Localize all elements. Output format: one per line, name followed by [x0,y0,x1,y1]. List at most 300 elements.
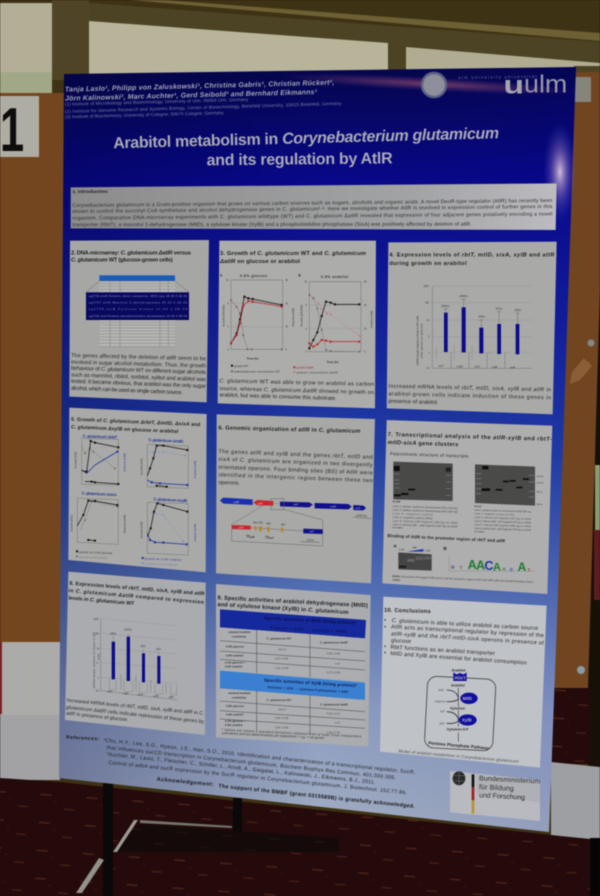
genomic text: orientated operons. Four binding sites (BS) of AtlR were [218,465,373,477]
chart B: 0.8% arabitol: Arabitol [mM] [370,311,374,328]
model of arabitol metabolism: Xylulose [450,706,465,710]
binding subheading: Binding of AtlR to the promoter region of rbtT and atlR [387,533,506,543]
sequence logo B: C [510,567,513,572]
ministry name: für Bildung [479,784,514,793]
microarray heading: 2. DNA-microarray: C. glutamicum ΔatlR versus [71,250,191,256]
references: Control of adhA and sucR expression by the SucR regulator in Corynebacterium glutamicum. J. Biotechnol. 152:77-86. [108,760,407,796]
expression text [388,384,551,406]
chart B: 0.8% arabitol: B [298,274,301,278]
table: MtlD activity: minimal medium [228,630,251,634]
references: ²Auchter, M., Laslo, T., Fleischer, C., Schiller, L., Arndt, A., Gaigalat, L., Kalinowski, J., Eikmanns, B.J., 2011. [106,752,376,786]
repression text: atlR in presence of glucose. [66,711,129,723]
growth heading: ΔatlR on glucose or arabitol [219,259,300,265]
gel 2 legend: M:rbtT [474,505,482,508]
chart: mtlD mutant: Arabitol [mM] [193,461,197,478]
repression bar chart: (125)x [124,627,133,631]
chart: xylB mutant: Arabitol [mM] [193,524,197,542]
repression heading: 8. Expression levels of rbtT, mtlD, sixA, xylB and atlR [69,581,205,597]
ministry name [479,775,541,802]
EMSA gel A: 1 μM [425,551,430,553]
repression bar chart: xylB [153,694,159,698]
references: that influences sucCD transcription in Corynebacterium glutamicum. Biochem Biophys Res Commun. 401:300-305. [106,745,396,781]
introduction text: Corynebacterium glutamicum is a Gram-positive organism that grows on various carbon sources such as sugars, alcohols and organic acids. A novel DeoR-type regulator (AtlR) has recently been [72,198,552,209]
chart: sixA mutant: Glucose [mM] [123,515,127,533]
transcription heading: mtlD-sixA gene clusters [388,440,458,448]
EMSA gel A: 0 nM [399,550,404,552]
gel 2 legend: M: marker [474,530,485,534]
growth legend [231,364,339,374]
poster sheet [59,67,580,832]
poster header: authors, title, logos [65,72,567,169]
repression bar chart: (9)x [156,647,161,651]
repression bar chart [92,618,177,700]
repression bar chart: rbtT [107,690,113,694]
flag stripe [472,774,474,814]
table: MtlD activity: 0.6% arabitol [225,665,243,669]
expression bar chart: 0.1 [427,368,431,370]
sequence logo B: A [518,560,527,574]
microarray table [86,275,189,347]
table: XylB activity: 0.8% arabitol [226,712,244,716]
gel 2: 500 bp [536,491,543,493]
gel 2 legend: Lane 6: internal sixA - mtlD fragment (750 bp) on cDNA [474,527,531,532]
gel 1 legend: M:atlR [393,500,401,504]
table: MtlD activity: 3.86 ± 0.88 [327,652,340,656]
growth legend: arabitol consumption ΔatlR [296,370,339,374]
panel: 6. Genomic organization [216,414,375,583]
repression bar chart: atlR [169,695,174,699]
repression heading: in C. glutamicum ΔatlR compared to expression [68,588,204,606]
expression bar chart: rbtT [438,364,444,368]
table: MtlD activity: 0.5-0.7 [278,648,287,652]
chart B: 0.8% arabitol: 0 [306,352,308,354]
genomic text: identified in the intergenic region between these two [218,472,373,484]
microarray table: cg2739 sixA Putative phosphohistidine phosphatase 10.38 3.3E-03 [89,314,188,318]
activities footnote: * Values are means ± standard deviations obtained from at least three independent [222,728,362,739]
model of arabitol metabolism: ADP [439,722,445,725]
expression bar chart: (59)x [514,308,522,312]
mutants legend [76,550,182,567]
title: Arabitol metabolism in Corynebacterium glutamicum [113,125,499,152]
microarray table: cg2733 pfoR Putative ribitol transporter, MFS-type 38.90 6.3E-03 [89,294,188,298]
chart: sixA mutant: C. glutamicum ΔsixA [82,490,117,497]
expression bar chart: sixA [474,365,480,369]
microarray table: cg2738 xylB Xylulose kinase 11.90 2.0E-03 [89,307,188,311]
expression heading: during growth on arabitol [389,261,467,267]
ministry name: Bundesministerium [479,775,541,786]
growth text: arabitol, but was able to consume this substrate. [219,392,337,402]
gel 2 legend: Lane 5: internal mtlD fragment (950 bp) on cDNA [474,523,531,528]
growth heading [219,251,366,265]
sequence logo B: A [468,558,477,572]
panel: 9. Specific activities [216,584,371,747]
gel 2: 200 bp [536,504,543,506]
authors: Jörn Kalinowski², Marc Auchter¹, Gerd Seibold³ and Bernhard Eikmanns¹ [65,89,318,103]
sequence logo B: G [451,564,455,569]
gel 2 [475,464,544,506]
intergenic region inset: BS4 [281,524,286,526]
gene cluster map: atlR [257,501,263,505]
gene cluster map: 1000 bp [356,514,367,518]
table: MtlD activity: 0.2% glucose + [225,661,246,665]
gel 1 legend: Lane 6: internal atlR - xylB fragment (397 bp) on cDNA [393,523,458,528]
table: XylB activity: minimal medium [228,691,251,695]
genomic heading: 6. Genomic organization of atlR in C. glutamicum [218,425,360,435]
gene cluster map: rbtT [293,503,299,507]
intergenic region inset: BS3 [266,523,271,525]
expression bar chart: (61)x [496,306,503,310]
gel 1 [393,462,453,501]
mutants legend: glucose consumption [79,555,108,560]
repression bar chart: (8)x [141,644,146,648]
expression bar chart: 100 [425,303,430,305]
gel 1 legend: Lane 1: positive control on chromosomal DNA (750 bp) [393,505,458,510]
activities heading [217,595,368,616]
genomic text [218,449,373,487]
chart A: 0.8% glucose: 40 [285,303,289,305]
gel 1 legend [393,500,458,530]
table: XylB activity: Specific activities of XylB (U/mg protein)* [264,677,357,688]
affiliations: (2) Institute for Genome Research and Systems Biology, Center of Biotechnology, Bielefeld University, 33615 Bielefeld, Germany [65,101,342,114]
expression bar chart: cells grown on glucose [420,323,424,358]
growth legend: growth WT [234,364,249,368]
expression bar chart: (54)x [478,315,486,319]
chart: mtlD mutant [140,437,197,488]
references: ¹Cho, H.Y., Lee, S.G., Hyeon, J.E., Han, S.O., 2010. Identification and characterization of a transcriptional regulator, SucR, [103,738,415,776]
chart A: 0.8% glucose: 0 [285,349,287,351]
table: XylB activity: 0.2% glucose + [225,719,246,723]
sequence logo B: C [484,559,493,573]
table: MtlD activity: C. glutamicum WT [267,636,292,640]
panel: 7. Transcriptional analysis [382,420,552,594]
introduction text: shown to control the succinyl CoA synthetase and alcohol dehydrogenase genes in C. glutamicum¹·². Here we investigate whether AtlR is involved in expression control of further genes in this [72,204,553,215]
sequence logo B: A [493,561,501,573]
EMSA gel A: AtlR [412,546,417,549]
gel 1 legend: Lane 5: internal atlR fragment (250 bp) on cDNA [393,520,458,525]
chart B: 0.8% arabitol: Time [h] [327,360,338,364]
panel: 2. DNA-microarray [69,240,209,402]
table: XylB activity: 0.54 ± 0.08 [275,725,289,729]
repression bar chart: 0.1 [96,691,100,693]
mutants heading: C. glutamicum ΔxylB on glucose or arabitol [71,424,179,435]
table: XylB activity: containing [232,696,246,700]
gel 2 legend: Lane 1: positive control on chromosomal DNA (397 bp) [474,509,531,514]
chart: mtlD mutant: C. glutamicum ΔmtlD [148,437,184,444]
conclusions heading: 10. Conclusions [384,608,431,615]
intergenic region inset: rbtT [269,537,274,540]
table: MtlD activity: containing [232,635,246,639]
room number sign [0,96,39,165]
affiliations [65,97,342,119]
activities heading: and of xylulose kinase (XylB) in C. glutamicum [217,602,349,616]
conclusions list: glucose [391,638,411,645]
growth heading: 3. Growth of C. glutamicum WT and C. glutamicum [220,251,366,257]
gene cluster map: mtlD [330,505,337,509]
chart A: 0.8% glucose [220,273,295,361]
growth text: C. glutamicum WT was able to grow on arabitol as carbon [219,378,374,388]
chart B: 0.8% arabitol: Growth [OD600] [300,305,304,327]
references [66,735,415,796]
chart: sixA mutant: Growth [OD] [70,515,74,532]
model of arabitol metabolism [424,668,496,751]
intergenic region inset: BS1 [253,523,258,525]
conclusions list: AtlR acts as transcriptional regulator by repression of the [391,624,544,639]
table: XylB activity: Xylulose + ATP → xylulose-5-phosphate + ADP [267,685,348,694]
table: XylB activity: 3.46 ± 0.38 [275,716,289,720]
table: XylB activity: 3.51 ± 1.12 [327,712,340,716]
mutants heading: 5. Growth of C. glutamicum ΔrbtT, ΔmtlD, ΔsixA and [71,417,200,428]
table: XylB activity [220,671,365,738]
chart: rbtT mutant: Glucose [mM] [123,453,127,472]
panel: 1. Introduction [71,183,557,230]
model of arabitol metabolism: Arabitol [451,684,465,688]
chart B: 0.8% arabitol: 40 [364,305,367,307]
university seal [421,72,447,98]
polycistronic subheading: Polycistronic structure of transcripts [390,451,468,459]
table: XylB activity: 0.5-0.7 [278,708,287,712]
panel: 3. Growth of WT and deletion strain [218,241,376,408]
intergenic region inset: rbtT [309,530,314,534]
expression bar chart: 1000 [423,286,429,288]
gene cluster map: xylB [232,500,239,504]
ministry name: und Forschung [479,792,525,802]
conclusions list: • [384,644,386,650]
conclusions list: RbtT functions as an arabitol transporter [390,645,495,657]
gel 2 legend: Lane 2: negative control (no RT) [474,512,515,517]
table: XylB activity: 1.66 ± 0.42 [327,730,340,734]
introduction text: transporter (RbtT), a mannitol 2-dehydrogenase (MtlD), a xylulose kinase (XylB) and a phosphohistidine phosphatase (SixA) was positively affected by deletion of atlR. [72,222,472,228]
repression heading [68,581,205,607]
expression text: presence of arabitol. [388,399,439,406]
microarray text: behaviour of C. glutamicum WT on different sugar alcohols [71,366,206,376]
microarray heading [71,250,191,264]
gel 2: 1000 bp [536,482,544,484]
chart B: 0.8% arabitol: 10 [304,282,308,284]
repression bar chart: 5 [97,663,99,665]
chart: mtlD mutant: Growth [OD] [140,458,144,475]
model of arabitol metabolism: MtlD [463,696,472,701]
chart: sixA mutant [70,490,127,544]
introduction heading: 1. Introduction [72,189,108,195]
intergenic region inset: BS2 [259,523,264,525]
repression bar chart: mtlD [123,691,128,695]
conclusions list: • [384,624,386,630]
expression bar chart: (696)x [459,294,468,298]
table: MtlD activity: Specific activities of MtlD (U/mg protein)* [264,615,357,625]
mutants legend: growth on 0.8% arabitol [145,557,182,562]
genomic text: sixA of C. glutamicum are organized in two divergently [218,457,373,469]
transcription heading: 7. Transcriptional analysis of the atlR-xylB and rbtT- [388,432,552,443]
chart B: 0.8% arabitol: 2 [306,328,308,330]
repression bar chart: cells [96,653,100,660]
sequence logo B: A [502,567,506,572]
room number sign: 1 [0,97,24,165]
gene cluster map [220,498,372,519]
chart A: 0.8% glucose: 20 [285,327,289,329]
chart B: 0.8% arabitol [298,274,374,364]
chart A: 0.8% glucose: Glucose [mM] [291,308,295,327]
conclusions list: C. glutamicum is able to utilize arabitol as carbon source [392,618,538,632]
activities heading: 9. Specific activities of arabitol dehydrogenase (MtlD) [217,595,368,609]
EMSA caption: in MEME. [392,579,401,582]
table: MtlD activity: 3.37 ± 0.58 [327,671,340,675]
chart: rbtT mutant: Growth [OD] [74,452,78,468]
growth text [219,378,374,402]
expression bar chart [415,286,532,370]
conclusions list: MtlD and XylB are essential for arabitol consumption [390,651,527,667]
references: References: [66,735,100,742]
table: MtlD activity [220,609,366,680]
icon: federal eagle [453,771,465,786]
activities footnote: cultivations and two determinations per experiment; ² n.g. = not grown. [222,731,325,740]
repression bar chart: 1000 [93,619,99,621]
expression bar chart: 1 [428,352,430,354]
chart B: 0.8% arabitol: 0 [364,352,366,354]
ulm university logo: ulm [524,72,567,99]
repression bar chart: 10 [97,648,100,650]
repression bar chart: (98)x [110,631,117,635]
conclusions list [384,618,544,667]
affiliations: (3) Institute of Biochemistry, University of Cologne, 50674 Cologne, Germany [65,110,224,119]
title [113,125,499,169]
expression bar chart: (965)x [441,304,450,308]
genomic text: operons. [218,480,241,487]
chart B: 0.8% arabitol: 0.8% arabitol [321,275,348,279]
microarray text: The genes affected by the deletion of atlR seem to be [71,353,206,362]
microarray text: involved in sugar alcohol metabolism. Thus, the growth [71,360,206,369]
expression text: arabitol-grown cells indicate induction of these genes in [388,391,551,401]
table: MtlD activity: 0.8% arabitol [226,653,244,657]
chart: xylB mutant: Growth [OD] [140,522,144,538]
chart B: 0.8% arabitol: 60 [364,282,367,284]
acknowledgement: Acknowledgement: [156,777,214,788]
table: XylB activity: C. glutamicum WT [267,698,292,702]
ulm university logo [458,72,567,99]
growth legend: growth ΔatlR [296,366,314,370]
model of arabitol metabolism: Arabitol [452,668,465,672]
gel 2: 1500 bp [536,476,544,478]
gel 1 legend: Lane 3: negative control [393,512,433,517]
model of arabitol metabolism: Xylulose-5-P [447,728,469,732]
chart: rbtT mutant [74,433,127,485]
model of arabitol metabolism: XylB [462,718,472,723]
chart A: 0.8% glucose: 60 [285,280,289,282]
gel 1 legend: Lane 2: positive control on chromosomal DNA (397 bp) [393,509,458,514]
model caption: Model of arabitol metabolism in Corynebacterium glutamicum [398,748,519,764]
chart B: 0.8% arabitol: 6 [306,305,308,307]
conclusions list: • [384,650,386,656]
chart A: 0.8% glucose: 2 [227,327,229,329]
gel 1 legend: Lane 4: negative control (RNA) [393,516,433,520]
sequence logo B: T [528,568,531,573]
mutants legend: growth on 0.8% glucose [79,550,113,555]
gel 2 legend: Lane 4: internal mtlD - rbtT fragment (747 bp) on cDNA [474,520,531,525]
microarray text: alcohol, which can be used as single carbon source. [71,386,183,396]
authors [65,80,334,103]
sequence logo B [443,546,535,574]
acknowledgement [156,777,416,810]
gel 1 legend: M: marker [393,526,403,530]
expression bar chart: xylB [492,365,497,369]
table: MtlD activity: C. glutamicum ΔatlR [320,640,348,644]
table: MtlD activity: 1.22 ± 0.28 [275,666,289,670]
chart: xylB mutant: C. glutamicum ΔxylB [153,496,188,503]
growth legend: arabitol/glucose consumption WT [234,370,280,374]
model of arabitol metabolism: ATP [440,711,445,714]
table: MtlD activity: n.d.² [335,662,340,666]
expression bar chart: 10 [427,320,430,322]
mutants legend: arabitol consumption [145,562,178,567]
table: XylB activity: 0.8% glucose [226,704,244,708]
repression text: Increased mRNA levels of rbtT, mtlD, sixA, xylB and atlR in C. [66,698,204,717]
table: MtlD activity: Arabitol + NAD⁺ → xylulose + NADH [271,626,347,634]
expression bar chart: mRNA levels relative to those in WT cells [415,315,419,366]
gene cluster map: sixA [355,506,361,510]
model of arabitol metabolism: NAD⁺ [438,689,445,692]
chart: rbtT mutant: C. glutamicum ΔrbtT [83,433,118,440]
microarray text [71,353,206,396]
chart A: 0.8% glucose: Time [h] [247,357,258,361]
conclusions list: atlR-xylB and the rbtT-mtlD-sixA operons in presence of [391,631,544,647]
model of arabitol metabolism: Pentose Phosphate Pathway [428,740,490,751]
chart: xylB mutant [140,496,197,555]
panel: 10. Conclusions [380,597,547,768]
model of arabitol metabolism: RbtT [455,676,466,682]
sequence logo B: A [476,558,485,572]
EMSA gel A [393,543,432,571]
chart A: 0.8% glucose: 0 [227,349,229,351]
chart A: 0.8% glucose: 10 [226,280,229,282]
BMBF logo [450,771,541,821]
expression text: Increased mRNA levels of rbtT, mtlD, sixA, xylB and atlR in [388,384,551,393]
transcription heading [388,432,552,448]
chart A: 0.8% glucose: 6 [227,303,229,305]
microarray table: cg2737 mtlD Mannitol 2-dehydrogenase 25.02 2.1E-03 [89,300,188,304]
intergenic region inset: atlR [250,536,255,539]
table: XylB activity: n.d.² [335,720,340,724]
expression heading: 4. Expression levels of rbtT, mtlD, sixA, xylB and atlR [389,253,555,259]
intergenic region inset: TS [265,535,269,539]
model of arabitol metabolism: NADH+H⁺ [435,701,447,704]
genomic text: The genes atlR and xylB and the genes rbtT, mtlD and [218,449,373,461]
table: MtlD activity: 0.8% glucose [226,644,244,648]
introduction text: organism. Comparative DNA-microarray experiments with C. glutamicum wildtype (WT) and C. glutamicum ΔatlR revealed that expression of four adjacent genes putatively encoding a novel [72,211,552,222]
repression bar chart: mRNA levels relative to those in WT [92,631,96,688]
EMSA caption: EMSA with purified His-tagged AtlR protein and the intergenic region of rbtT and atlR-xylB and identified binding motive [392,575,534,584]
microarray heading: C. glutamicum WT (glucose-grown cells) [71,258,173,264]
repression heading: levels in C. glutamicum WT [68,595,135,607]
mutants heading [71,417,200,435]
expression bar chart: atlR [510,365,516,369]
intergenic region inset: atlR [239,525,243,529]
intergenic region inset: 100 bp [307,540,314,542]
chart A: 0.8% glucose: 0.8% glucose [240,274,267,278]
affiliations: (1) Institute of Microbiology and Biotechnology, University of Ulm, 89069 Ulm, Germany [65,97,249,107]
growth text: source, whereas C. glutamicum ΔatlR showed no growth on [219,386,374,396]
panel: 8. Expression in deletion strain [65,572,206,735]
intergenic region inset [232,506,323,546]
authors: Tanja Laslo¹, Philipp von Zaluskowski¹, Christina Gabris¹, Christian Rückert², [65,80,334,94]
expression heading [389,253,555,267]
panel: 5. Growth of deletion mutants [68,408,207,572]
ulm university logo: ulm university universität [458,74,537,80]
repression bar chart: 1 [97,678,99,680]
sequence logo B: B [443,546,447,551]
ulm university logo: u [503,72,524,99]
microarray text: such as mannitol, ribitol, sorbitol, xylitol and arabitol was [71,372,206,383]
chart A: 0.8% glucose: Growth [OD600] [222,305,226,327]
repression text: glutamicum ΔatlR cells indicate repression of these genes by [66,705,205,725]
